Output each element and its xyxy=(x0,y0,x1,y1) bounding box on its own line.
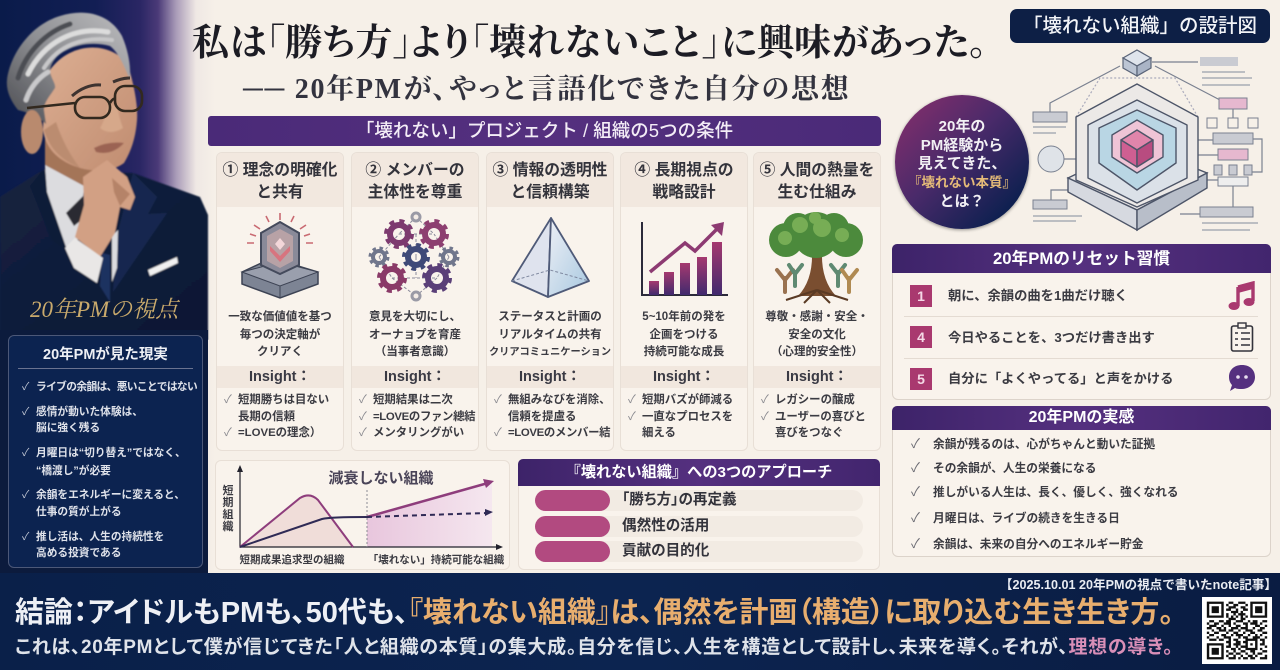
card 4 description xyxy=(642,310,726,358)
line chart: 織 xyxy=(222,519,234,533)
callout circle: 20年の xyxy=(939,118,985,135)
card 5 title: ⑤ 人間の熱量を xyxy=(760,162,874,179)
card 4: long-term strategy xyxy=(620,152,748,451)
blueprint heading xyxy=(1010,9,1270,43)
card 1 description xyxy=(228,310,332,358)
panel: three approaches xyxy=(518,459,880,570)
card 1 insight list xyxy=(224,393,329,439)
panel: reset habits xyxy=(892,244,1271,400)
card 2 insight label: Insight： xyxy=(384,369,446,385)
card 1 title: と共有 xyxy=(256,184,304,200)
reality items: “橋渡し”が必要 xyxy=(36,465,111,477)
conclusion band xyxy=(0,573,1280,670)
felt truth 3: 推しがいる人生は、長く、優しく、強くなれる xyxy=(933,486,1178,499)
people silhouettes xyxy=(777,265,857,292)
pocket square xyxy=(148,257,178,276)
reality items: 高める投資である xyxy=(36,547,121,559)
portrait caption: 20年PMの視点 xyxy=(30,297,178,322)
card 2: member autonomy: ✓ xyxy=(359,410,367,422)
reality items: ✓ xyxy=(22,406,29,418)
glasses xyxy=(27,86,142,118)
card 1 description: 一致な価値値を基つ xyxy=(228,311,332,323)
conclusion subline: これは、20年PMとして僕が信じてきた「人と組織の本質」の集大成。自分を信じ、人生を構造として設計し、未来を導く。それが、理想の導き。 xyxy=(15,637,1173,658)
reality items xyxy=(22,380,198,559)
card 1 insight list: =LOVEの理念） xyxy=(238,427,321,439)
suit xyxy=(0,170,208,340)
felt truth 4: 月曜日は、ライブの続きを生きる日 xyxy=(933,512,1120,525)
habit badge 1: 1 xyxy=(917,288,925,304)
felt truths heading: 20年PMの実感 xyxy=(1029,409,1134,426)
bottom suit backdrop xyxy=(0,330,208,573)
habit badge 3 xyxy=(910,368,932,390)
line chart: 短 xyxy=(222,483,234,497)
card 2 insight list xyxy=(359,393,476,439)
callout circle: 『壊れない本質』 xyxy=(908,175,1016,190)
line chart: 組 xyxy=(222,507,234,521)
three approaches heading: 『壊れない組織』への3つのアプローチ xyxy=(566,464,832,481)
approach pill 1 xyxy=(535,490,610,511)
icon: speech bubble xyxy=(1229,365,1255,391)
icon: network of gears xyxy=(368,212,460,302)
title: 私は「勝ち方」より「壊れないこと」に興味があった。 xyxy=(192,22,988,63)
habit text 1: 朝に、余韻の曲を1曲だけ聴く xyxy=(948,288,1128,303)
left background gradient xyxy=(0,0,215,575)
card 3 insight list xyxy=(494,393,611,439)
face xyxy=(43,48,137,171)
card 3 title: ③ 情報の透明性 xyxy=(493,162,607,179)
reality items: 仕事の質が上がる xyxy=(36,506,122,518)
card 2: member autonomy: ✓ xyxy=(359,427,367,439)
card 2 insight list: 短期結果は二次 xyxy=(373,394,453,406)
card 2: member autonomy: ✓ xyxy=(359,394,367,406)
icon: clipboard checklist xyxy=(1230,322,1254,352)
habit badge 1 xyxy=(910,285,932,307)
card 1: shared principles: ✓ xyxy=(224,394,232,406)
label boxes xyxy=(1033,57,1258,217)
reality items: ✓ xyxy=(22,381,29,393)
card 4 description: 5~10年前の発を xyxy=(642,311,726,323)
QR code xyxy=(1202,597,1272,664)
line chart: 「壊れない」持続可能な組織 xyxy=(368,553,505,566)
divider habit 1 xyxy=(904,316,1258,317)
card 4 description: 企画をつける xyxy=(650,328,718,340)
panel: PM's felt truths xyxy=(892,406,1271,557)
tie xyxy=(100,253,110,302)
felt truth 3: ✓ xyxy=(911,484,920,499)
habit badge 3: 5 xyxy=(917,371,925,387)
card 4 title: ④ 長期視点の xyxy=(634,162,734,179)
reality items: ✓ xyxy=(22,531,29,543)
card 5 insight list: レガシーの醸成 xyxy=(775,394,855,406)
card 2 title: 主体性を尊重 xyxy=(368,184,462,200)
reality items: ✓ xyxy=(22,489,29,501)
card 3 description: ステータスと計画の xyxy=(498,311,602,323)
approach pill 2 xyxy=(535,516,610,537)
card 3 title: と信頼構築 xyxy=(510,184,590,200)
card 1: shared principles: ✓ xyxy=(224,427,232,439)
reality items: 推し活は、人生の持続性を xyxy=(36,531,164,543)
approach label 3: 貢献の目的化 xyxy=(622,543,709,559)
callout circle xyxy=(895,95,1029,229)
card 4: long-term strategy: ✓ xyxy=(628,410,636,422)
card 5 insight label: Insight： xyxy=(786,369,848,385)
shirt xyxy=(45,165,84,247)
panel: reality list xyxy=(8,335,203,568)
card 3 title xyxy=(487,153,613,207)
ear xyxy=(21,110,43,154)
card 1 title xyxy=(217,153,343,207)
reality items: 余韻をエネルギーに変えると、 xyxy=(36,489,185,501)
approach label 1: 「勝ち方」の再定義 xyxy=(622,492,737,508)
card 5: human warmth xyxy=(753,152,881,451)
approach row 2 xyxy=(535,516,863,537)
card 1 insight list: 短期勝ちは目ない xyxy=(238,394,329,406)
card 3: transparency and trust: ✓ xyxy=(494,394,502,406)
approach row 1 xyxy=(535,490,863,511)
card 5 description: （心理的安全性） xyxy=(771,346,863,358)
felt truth 1: ✓ xyxy=(911,436,920,451)
card 2 insight list: =LOVEのファン總結 xyxy=(373,410,475,422)
icon: glass pyramid xyxy=(511,217,590,298)
line chart: 短期成果追求型の組織 xyxy=(240,553,345,566)
card 3 insight list: =LOVEのメンバー結 xyxy=(508,427,610,439)
reality items: 感情が動いた体験は、 xyxy=(36,406,143,418)
nested hexagon layers xyxy=(1076,84,1198,207)
card 2 title: ② メンバーの xyxy=(365,162,465,179)
habit badge 2: 4 xyxy=(917,329,925,345)
card 1 description: クリアく xyxy=(257,346,303,358)
card 2 description: オーナョプを育産 xyxy=(369,328,461,340)
approach pill 3 xyxy=(535,541,610,562)
chart panel: non-declining organization xyxy=(215,460,510,570)
card 5: human warmth: ✓ xyxy=(761,394,769,406)
callout circle: とは？ xyxy=(939,193,984,210)
card 1 insight label: Insight： xyxy=(249,369,311,385)
section heading: five conditions: 「壊れない」プロジェクト / 組織の5つの条件 xyxy=(356,120,733,141)
three approaches heading xyxy=(518,459,880,486)
hand and cuff xyxy=(75,160,135,257)
habit text 2: 今日やることを、3つだけ書き出す xyxy=(948,330,1155,345)
felt truth 5: 余韻は、未来の自分へのエネルギー貯金 xyxy=(933,538,1143,551)
habit badge 2 xyxy=(910,326,932,348)
card 4 insight list: 短期バズが師減る xyxy=(642,394,733,406)
card 4 insight list xyxy=(628,392,733,439)
felt truth 4: ✓ xyxy=(911,510,920,525)
hair xyxy=(7,13,130,124)
felt truth 1: 余韻が残るのは、心がちゃんと動いた証拠 xyxy=(933,438,1155,451)
card 2: member autonomy xyxy=(351,152,479,451)
reality items: ✓ xyxy=(22,447,29,459)
card 3 insight list: 無組みなびを消除、 xyxy=(508,394,611,406)
card 3 description: リアルタイムの共有 xyxy=(498,328,602,340)
blueprint heading: 「壊れない組織」の設計図 xyxy=(1023,15,1257,37)
top cube xyxy=(1123,50,1151,76)
reality items: ライブの余韻は、悪いことではない xyxy=(36,381,197,393)
card 4 title: 戦略設計 xyxy=(652,184,716,200)
card 1 title: ① 理念の明確化 xyxy=(223,162,337,179)
felt truth 2: その余韻が、人生の栄養になる xyxy=(933,462,1096,475)
base platform xyxy=(1068,145,1207,230)
card 2 title xyxy=(352,153,478,207)
card 4 insight list: 細える xyxy=(642,427,676,439)
conclusion headline: 結論：アイドルもPMも、50代も、『壊れない組織』は、偶然を計画（構造）に取り込む生き生き方。 xyxy=(15,597,1174,629)
card 4 title xyxy=(621,153,747,207)
source note: 【2025.10.01 20年PMの視点で書いたnote記事】 xyxy=(1000,578,1277,592)
habit text 3: 自分に「よくやってる」と声をかける xyxy=(948,371,1173,386)
card 5 insight list: 喜びをつなぐ xyxy=(775,427,843,439)
panel heading: 20年PMが見た現実 xyxy=(43,347,168,363)
line chart xyxy=(222,465,505,566)
isometric blueprint diagram xyxy=(1032,49,1263,232)
card 5 description: 安全の文化 xyxy=(788,328,846,340)
icon: tree with people xyxy=(769,212,863,304)
card 5 description xyxy=(765,310,869,358)
divider habit 2 xyxy=(904,358,1258,359)
card 3: transparency and trust xyxy=(486,152,614,451)
section heading: five conditions xyxy=(208,116,881,146)
card 3 insight label xyxy=(487,366,613,388)
felt truth 2: ✓ xyxy=(911,460,920,475)
card 2 description: （当事者意識） xyxy=(375,346,455,358)
card 2 insight list: メンタリングがい xyxy=(373,427,464,439)
card 4: long-term strategy: ✓ xyxy=(628,394,636,406)
approach label 2: 偶然性の活用 xyxy=(622,518,709,534)
card 5 insight list: ユーザーの喜びと xyxy=(775,410,866,422)
callout circle: PM経験から xyxy=(921,137,1003,154)
card 1 insight list: 長期の信頼 xyxy=(238,410,295,422)
card 5: human warmth: ✓ xyxy=(761,410,769,422)
card 2 description xyxy=(369,310,461,358)
card 4 insight label: Insight： xyxy=(653,369,715,385)
portrait of the 20-year PM xyxy=(0,12,210,340)
card 3: transparency and trust: ✓ xyxy=(494,427,502,439)
icon: monolith on base xyxy=(240,213,320,299)
approach row 3 xyxy=(535,541,863,562)
card 5 title: 生む仕組み xyxy=(778,184,856,200)
card 2 insight label xyxy=(352,366,478,388)
subtitle: ── 20年PMが、やっと言語化できた自分の思想 xyxy=(243,74,850,105)
felt truths heading xyxy=(892,406,1271,430)
icon: music note xyxy=(1228,281,1255,310)
line chart: 期 xyxy=(222,495,234,509)
card 5 insight label xyxy=(754,366,880,388)
card 5 insight list xyxy=(761,393,866,439)
card 1 description: 毎つの決定軸が xyxy=(240,328,320,340)
eyebrows xyxy=(72,78,130,96)
card 4 insight list: 一直なプロセスを xyxy=(642,410,733,422)
reset habits heading: 20年PMのリセット習慣 xyxy=(993,249,1170,268)
card 5 description: 尊敬・感謝・安全・ xyxy=(765,311,869,323)
card 5 title xyxy=(754,153,880,207)
felt truth 5: ✓ xyxy=(911,536,920,551)
heading underline xyxy=(18,368,193,369)
reality items: 脳に強く残る xyxy=(36,422,100,434)
card 3 insight list: 信頼を提盧る xyxy=(508,410,576,422)
card 3 description xyxy=(489,310,611,358)
card 1: shared principles xyxy=(216,152,344,451)
card 1 insight label xyxy=(217,366,343,388)
line chart: 減衰しない組織 xyxy=(328,469,434,487)
reset habits heading xyxy=(892,244,1271,273)
card 4 description: 持続可能な成長 xyxy=(644,346,724,358)
reality items: 月曜日は“切り替え”ではなく、 xyxy=(36,447,186,459)
card 4 insight label xyxy=(621,366,747,388)
card 3 description: クリアコミュニケーション xyxy=(489,347,611,358)
card 2 description: 意見を大切にし、 xyxy=(369,311,461,323)
card 3 insight label: Insight： xyxy=(519,369,581,385)
icon: growth bar chart xyxy=(641,222,728,296)
callout circle: 見えてきた、 xyxy=(918,155,1006,172)
neck xyxy=(45,130,104,188)
